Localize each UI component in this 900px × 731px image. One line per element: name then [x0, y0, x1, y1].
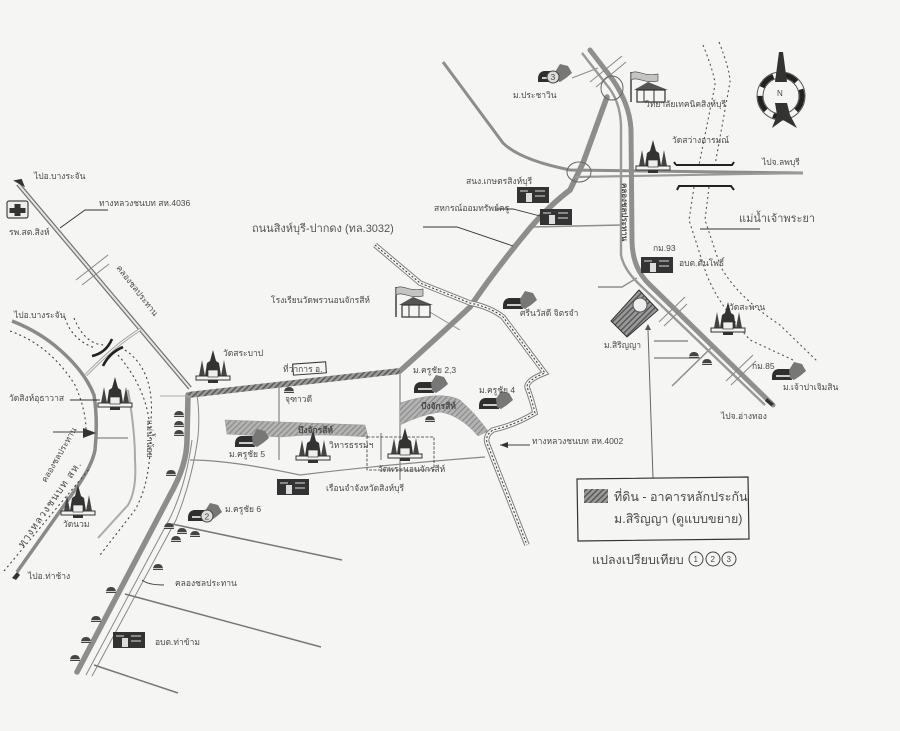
map labels: west: ทางหลวงชนบท สห.4036	[99, 198, 191, 208]
map labels: centre	[155, 222, 624, 647]
icons: flag schools	[396, 72, 668, 317]
legend: comparison plots: แปลงเปรียบเทียบ	[592, 553, 684, 567]
map labels: west: คลองชลประทาน	[114, 263, 160, 318]
map labels: centre: ทางหลวงชนบท สห.4002	[532, 436, 624, 446]
map labels: east: วิทยาลัยเทคนิคสิงห์บุรี	[645, 99, 726, 110]
map labels: centre: ที่ว่าการ อ.	[283, 363, 322, 374]
compass north arrow: N	[777, 89, 783, 98]
map labels: east: วัดสว่างอารมณ์	[672, 135, 729, 145]
river: Chao Phraya banks north	[689, 42, 818, 362]
legend: comparison plots: 3	[726, 555, 732, 564]
map labels: centre: ม.ครูชัย 6	[225, 504, 261, 515]
map labels: west: ทางหลวงชนบท สห.	[16, 459, 85, 550]
map labels: centre: คลองชลประทาน	[175, 578, 237, 588]
map labels: west: ไปอ.บางระจัน	[13, 310, 66, 320]
map labels: centre: โรงเรียนวัดพรวนอนจักรสีห์	[271, 295, 370, 305]
icons: small houses	[70, 352, 712, 661]
dashed university boundary	[367, 437, 434, 470]
map labels: east: กม.93	[653, 243, 676, 253]
map labels: east: ม.เจ้าปาเจิมสิน	[783, 382, 838, 392]
map labels: centre: ม.ครูชัย 5	[229, 449, 265, 460]
map labels: west: คลองชลประทาน	[39, 425, 79, 484]
icons: numbered plots: 2	[204, 512, 210, 522]
icons: houses with trees	[188, 64, 806, 521]
university land plot	[611, 290, 658, 478]
map labels: west: วัดนวม	[63, 519, 89, 529]
leader lines	[60, 209, 760, 400]
irrigation canal beside south road	[86, 395, 485, 693]
kilometre post sign	[293, 362, 326, 375]
map labels: east: อบต.ต้นโพธิ์	[679, 257, 726, 268]
map labels: centre: วัดพระนอนจักรสีห์	[378, 464, 445, 474]
map labels: centre: เรือนจำจังหวัดสิงห์บุรี	[326, 483, 405, 494]
map labels: east: ม.ประชาวิน	[513, 90, 557, 100]
map labels: west: วัดสิงห์อุธาวาส	[9, 393, 65, 404]
map labels: east: ม.สิริญญา	[604, 340, 641, 350]
map labels: west: รพ.สต.สิงห์	[9, 227, 50, 237]
map labels: centre: ม.ครูชัย 4	[479, 385, 515, 396]
map labels: east: ไปจ.ลพบุรี	[761, 157, 800, 168]
icons: dark buildings	[113, 187, 673, 648]
map labels: west: วัดสระบาป	[223, 348, 263, 358]
map labels: east: ไปจ.อ่างทอง	[720, 411, 767, 421]
map labels: centre: วิหารธรรมฯ	[329, 440, 374, 450]
map labels: centre: บึงจักรสีห์	[421, 401, 456, 411]
map labels: west: ไปอ.ท่าช้าง	[27, 571, 70, 581]
map labels: east	[434, 90, 838, 421]
road: east main road to Ang Thong	[567, 50, 774, 406]
map labels: east: แม่น้ำเจ้าพระยา	[739, 210, 815, 225]
map labels: east: ศรีนวัสดี จิตรจำ	[520, 308, 578, 318]
legend box: ที่ดิน - อาคารหลักประกัน	[614, 488, 748, 504]
Nong Chakkrasi lake west	[225, 420, 368, 437]
legend: comparison plots: 1	[694, 555, 698, 564]
map labels: west: แม่น้ำน้อย	[145, 420, 156, 458]
icons: numbered plots: 3	[550, 72, 556, 82]
icons: temples	[61, 140, 745, 518]
compass north arrow	[757, 52, 805, 128]
map labels: west	[9, 171, 263, 581]
icon: hospital cross	[7, 201, 28, 218]
map labels: east: สหกรณ์ออมทรัพย์ครู	[434, 203, 510, 214]
map labels: centre: บึงจักรสีห์	[298, 425, 333, 435]
Nong Chakkrasi lake east	[400, 396, 488, 436]
map labels: east: กม.85	[752, 361, 775, 371]
road: highway 4002 with dashes	[375, 245, 545, 545]
legend: comparison plots: 2	[710, 555, 716, 564]
road: Singburi-Pakkhong 3032	[77, 97, 607, 672]
road: left curved highway	[4, 318, 151, 580]
map labels: east: วัดสะพาน	[729, 302, 765, 312]
road label: irrigation canal east: คลองชลประทาน	[620, 183, 629, 242]
map labels: centre: อบต.ท่าข้าม	[155, 637, 200, 647]
map labels: east: สนง.เกษตรสิงห์บุรี	[466, 176, 533, 187]
legend box	[577, 477, 749, 541]
legend box: ม.สิริญญา (ดูแบบขยาย)	[614, 512, 742, 527]
map labels: west: ไปอ.บางระจัน	[33, 171, 86, 181]
map labels: centre: ถนนสิงห์บุรี-ปากดง (ทล.3032)	[252, 222, 394, 235]
legend: comparison plots	[592, 552, 736, 567]
map labels: centre: จุฑาวดี	[285, 394, 312, 405]
bridge symbols over the river	[674, 162, 734, 190]
icons: numbered plots	[201, 71, 559, 522]
road: highway 4036 north-west	[16, 180, 190, 388]
road: connector roads and lanes	[279, 62, 803, 480]
map labels: centre: ม.ครูชัย 2,3	[413, 365, 456, 376]
